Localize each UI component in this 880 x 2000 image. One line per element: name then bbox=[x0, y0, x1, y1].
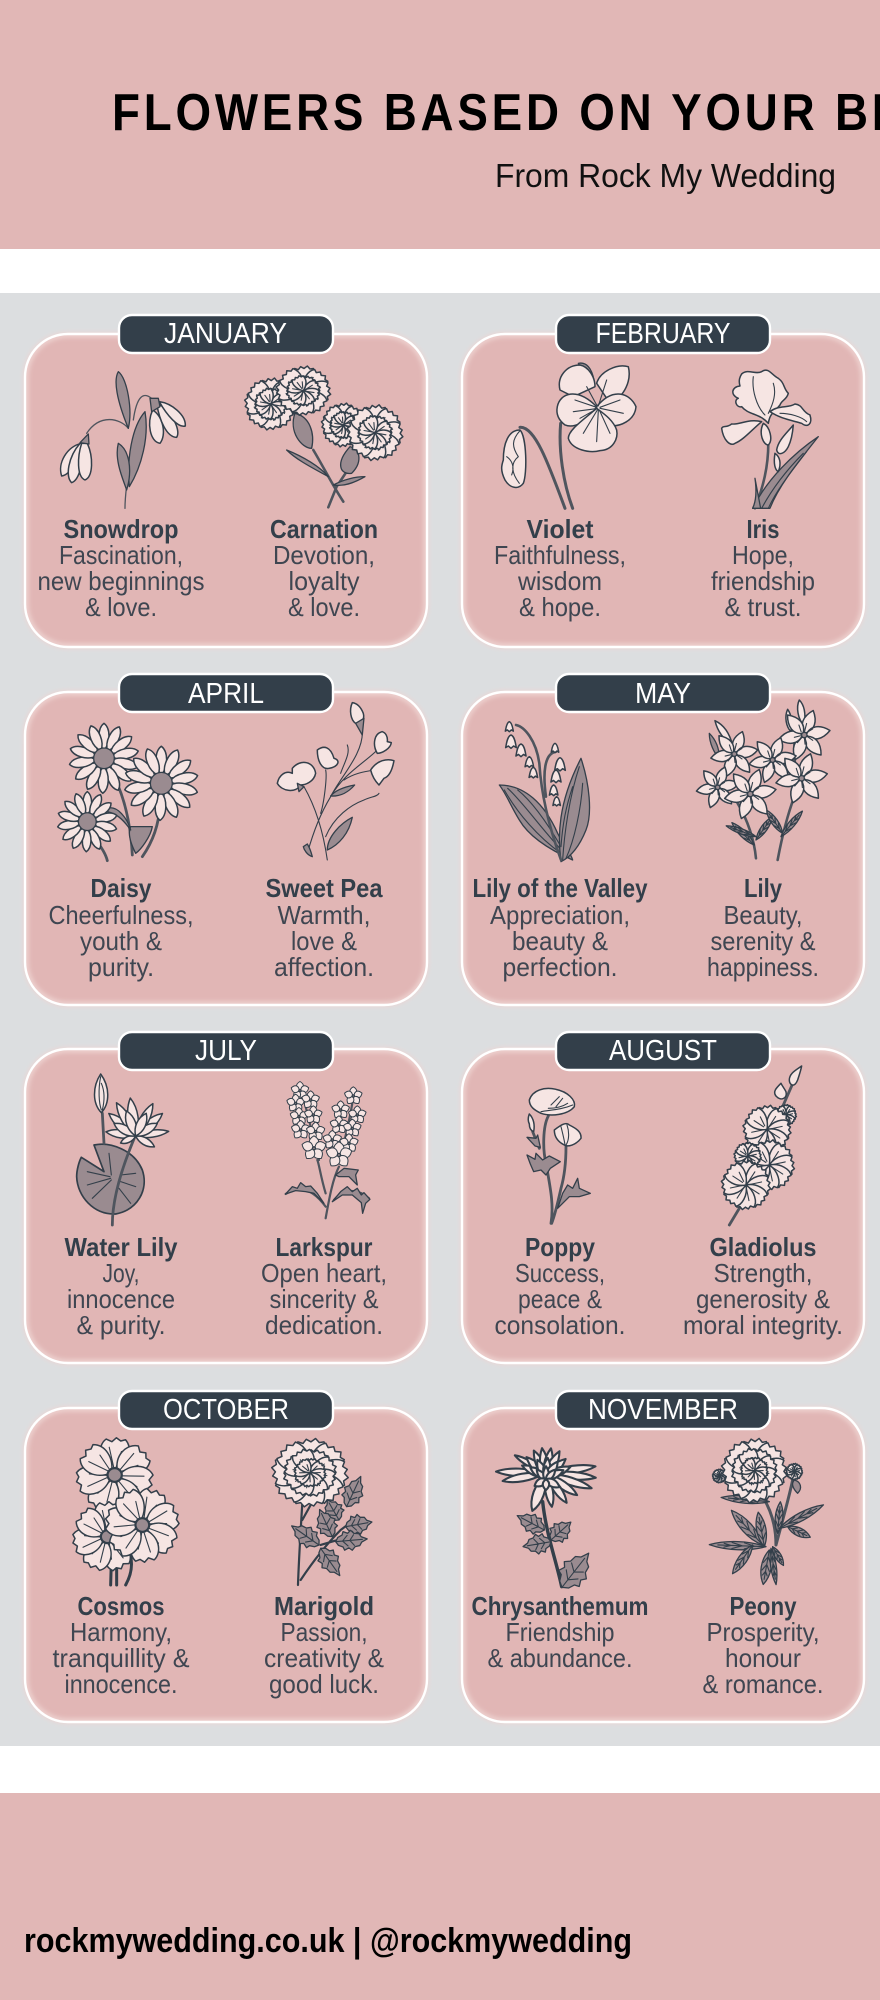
icon: carnation bbox=[245, 366, 403, 507]
panel: May bbox=[462, 674, 864, 1005]
icon: cosmos bbox=[70, 1438, 192, 1585]
panel: October bbox=[25, 1391, 427, 1722]
text: Lily of the Valley: perfection. bbox=[502, 952, 618, 982]
text: Poppy: Success, bbox=[515, 1258, 605, 1288]
text: Sweet Pea: Sweet Pea bbox=[266, 873, 383, 903]
icon: iris bbox=[722, 370, 818, 508]
text: Iris: Iris bbox=[746, 514, 780, 544]
footer band bbox=[0, 1793, 880, 2000]
text: Lily bbox=[707, 873, 819, 982]
text: Larkspur: sincerity & bbox=[270, 1284, 378, 1314]
text: Larkspur: Open heart, bbox=[261, 1258, 387, 1288]
text: Gladiolus: Strength, bbox=[714, 1258, 812, 1288]
text: Peony: Peony bbox=[730, 1591, 797, 1621]
text: Cosmos: Cosmos bbox=[78, 1591, 164, 1621]
text: Larkspur: Larkspur bbox=[276, 1232, 372, 1262]
text: Lily of the Valley: beauty & bbox=[512, 926, 608, 956]
text: Carnation: Devotion, bbox=[273, 540, 375, 570]
text: Cosmos: innocence. bbox=[64, 1669, 178, 1699]
icon: sweet pea bbox=[277, 703, 394, 860]
text: Carnation: & love. bbox=[288, 592, 360, 622]
grey panel bbox=[0, 293, 880, 746]
month tab: OCTOBER bbox=[163, 1394, 289, 1426]
icon: lily bbox=[696, 700, 831, 860]
icon: water lily bbox=[77, 1074, 169, 1225]
month tab bbox=[119, 1391, 333, 1429]
month tab bbox=[556, 1391, 770, 1429]
month tab bbox=[119, 315, 333, 353]
footer text: rockmywedding.co.uk | @rockmywedding bbox=[24, 1922, 632, 1960]
text: Sweet Pea: affection. bbox=[274, 952, 374, 982]
panel: April bbox=[25, 674, 427, 1005]
text: Daisy: purity. bbox=[88, 952, 154, 982]
text: Daisy: Cheerfulness, bbox=[48, 900, 194, 930]
text: Lily of the Valley: Appreciation, bbox=[490, 900, 630, 930]
text: Lily: serenity & bbox=[710, 926, 816, 956]
text: Gladiolus bbox=[683, 1232, 843, 1340]
icon: marigold bbox=[272, 1438, 374, 1585]
text: Water Lily: Water Lily bbox=[64, 1232, 178, 1262]
month tab: JANUARY bbox=[164, 318, 287, 350]
month tab bbox=[556, 674, 770, 712]
icon: gladiolus bbox=[721, 1066, 802, 1225]
text: Daisy bbox=[48, 873, 194, 982]
month tab bbox=[556, 1032, 770, 1070]
text: Sweet Pea: Warmth, bbox=[278, 900, 370, 930]
text: Peony: honour bbox=[725, 1643, 801, 1673]
text: Peony: & romance. bbox=[702, 1669, 824, 1699]
text: Chrysanthemum: & abundance. bbox=[488, 1643, 632, 1673]
text: Marigold bbox=[264, 1591, 384, 1699]
text: Lily of the Valley bbox=[472, 873, 648, 982]
text: Gladiolus: generosity & bbox=[696, 1284, 830, 1314]
grey panel continued bbox=[0, 746, 880, 1746]
text: Iris: & trust. bbox=[724, 592, 802, 622]
panel: November bbox=[462, 1391, 864, 1722]
header band bbox=[0, 0, 880, 249]
icon: snowdrop bbox=[61, 372, 185, 508]
text: Cosmos: tranquillity & bbox=[52, 1643, 190, 1673]
text: Chrysanthemum: Chrysanthemum bbox=[472, 1591, 648, 1621]
month tab: APRIL bbox=[188, 678, 264, 710]
text: Water Lily: & purity. bbox=[76, 1310, 166, 1340]
text: Poppy: peace & bbox=[518, 1284, 602, 1314]
text: Lily: happiness. bbox=[707, 952, 819, 982]
text: Carnation bbox=[270, 514, 378, 622]
text: Snowdrop: Snowdrop bbox=[64, 514, 178, 544]
text: Iris: friendship bbox=[711, 566, 815, 596]
text: Lily: Beauty, bbox=[724, 900, 802, 930]
icon: poppy bbox=[527, 1088, 590, 1223]
text: Chrysanthemum: Friendship bbox=[506, 1617, 614, 1647]
month tab bbox=[119, 674, 333, 712]
text: Poppy: consolation. bbox=[494, 1310, 626, 1340]
text: Sweet Pea: love & bbox=[291, 926, 357, 956]
text: Poppy bbox=[494, 1232, 626, 1340]
text: Carnation: Carnation bbox=[270, 514, 378, 544]
text: Violet: Violet bbox=[526, 514, 594, 544]
text: Marigold: Marigold bbox=[274, 1591, 374, 1621]
text: Violet bbox=[494, 514, 626, 622]
text: Lily: Lily bbox=[744, 873, 782, 903]
panel: February bbox=[462, 315, 864, 647]
text: Sweet Pea bbox=[266, 873, 383, 982]
icon: lily of the valley bbox=[499, 722, 590, 862]
text: Marigold: creativity & bbox=[264, 1643, 384, 1673]
month tab: FEBRUARY bbox=[596, 318, 730, 350]
text: Poppy: Poppy bbox=[525, 1232, 595, 1262]
text: Water Lily: innocence bbox=[67, 1284, 175, 1314]
text: Snowdrop: & love. bbox=[85, 592, 157, 622]
month tab: AUGUST bbox=[609, 1035, 717, 1067]
icon: daisy bbox=[57, 723, 199, 861]
text: Iris: Hope, bbox=[732, 540, 794, 570]
text: Cosmos bbox=[52, 1591, 190, 1699]
text: Marigold: Passion, bbox=[280, 1617, 368, 1647]
text: Snowdrop: new beginnings bbox=[38, 566, 204, 596]
icon: chrysanthemum bbox=[496, 1448, 600, 1596]
text: Violet: wisdom bbox=[517, 566, 602, 596]
text: Peony bbox=[702, 1591, 824, 1699]
text: Lily of the Valley: Lily of the Valley bbox=[472, 873, 648, 903]
text: Cosmos: Harmony, bbox=[70, 1617, 172, 1647]
month tab: JULY bbox=[195, 1035, 257, 1067]
text: Violet: Faithfulness, bbox=[494, 540, 626, 570]
text: Peony: Prosperity, bbox=[706, 1617, 820, 1647]
text: Larkspur: dedication. bbox=[265, 1310, 383, 1340]
panel: August bbox=[462, 1032, 864, 1363]
text: Water Lily bbox=[64, 1232, 178, 1340]
text: Carnation: loyalty bbox=[288, 566, 360, 596]
text: Water Lily: Joy, bbox=[102, 1258, 140, 1288]
text: Marigold: good luck. bbox=[269, 1669, 379, 1699]
text: Iris bbox=[711, 514, 815, 622]
subtitle: From Rock My Wedding bbox=[495, 157, 836, 194]
text: Snowdrop bbox=[38, 514, 204, 622]
icon: violet bbox=[502, 363, 636, 508]
month tab bbox=[556, 315, 770, 353]
text: Chrysanthemum bbox=[472, 1591, 648, 1673]
text: Daisy: youth & bbox=[80, 926, 162, 956]
panel: July bbox=[25, 1032, 427, 1363]
icon: larkspur bbox=[286, 1081, 370, 1218]
month tab: NOVEMBER bbox=[588, 1394, 738, 1426]
month tab: MAY bbox=[635, 678, 691, 710]
text: Larkspur bbox=[261, 1232, 387, 1340]
text: Gladiolus: moral integrity. bbox=[683, 1310, 843, 1340]
panel: January bbox=[25, 315, 427, 647]
text: Snowdrop: Fascination, bbox=[59, 540, 183, 570]
text: Daisy: Daisy bbox=[90, 873, 152, 903]
text: Violet: & hope. bbox=[519, 592, 601, 622]
icon: peony bbox=[709, 1438, 825, 1585]
month tab bbox=[119, 1032, 333, 1070]
text: Gladiolus: Gladiolus bbox=[710, 1232, 816, 1262]
